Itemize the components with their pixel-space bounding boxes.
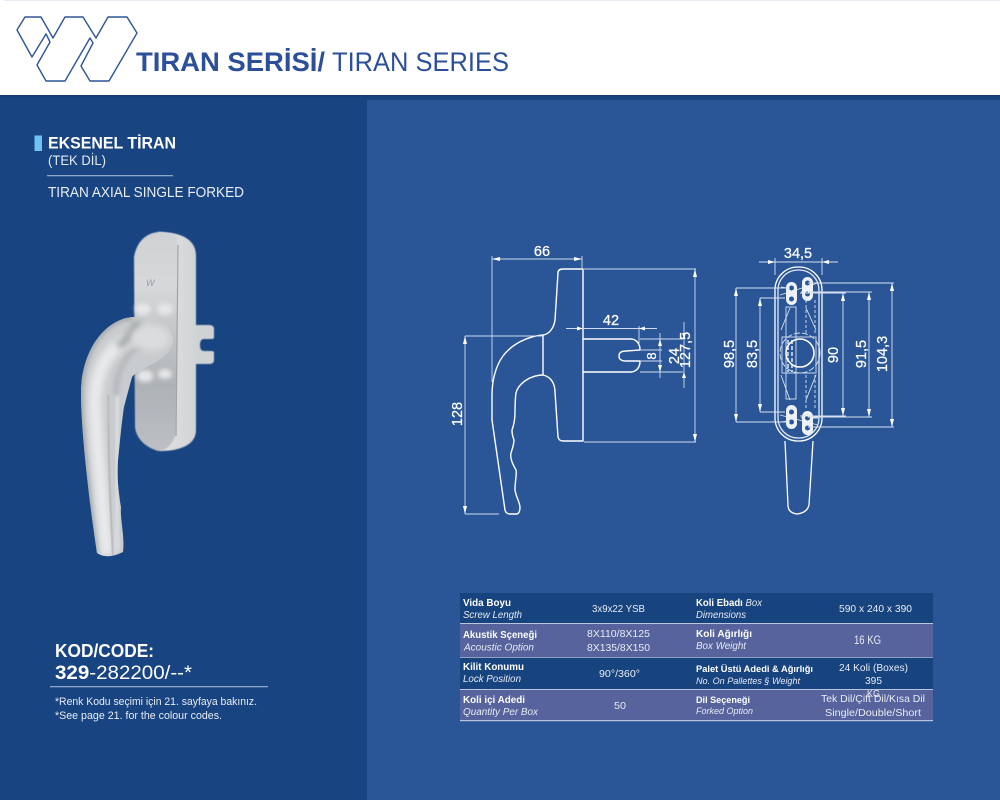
table rows bbox=[460, 593, 933, 721]
colour code notes bbox=[55, 696, 257, 722]
row values right: KG bbox=[867, 688, 880, 700]
plate side bbox=[158, 232, 196, 451]
side view dimension labels: 24 bbox=[667, 348, 683, 364]
row labels right: Dimensions bbox=[696, 610, 746, 621]
row values right: 24 Koli (Boxes) bbox=[839, 662, 908, 674]
row values left: 90°/360° bbox=[599, 668, 640, 680]
front view dimension labels: 34,5 bbox=[784, 246, 812, 262]
row values left: 8X110/8X125 bbox=[587, 628, 650, 640]
title bbox=[136, 47, 509, 77]
row values right bbox=[821, 603, 925, 719]
row labels left: Akustik Sçeneği bbox=[463, 630, 537, 641]
rosette highlights bbox=[135, 303, 173, 382]
row values right: 395 bbox=[865, 675, 882, 687]
title: TIRAN SERİSİ/ bbox=[136, 47, 325, 77]
handle outline bbox=[492, 269, 640, 514]
plate outline bbox=[775, 267, 822, 514]
side view dimension labels: 127,5 bbox=[678, 332, 694, 368]
row values left: 50 bbox=[614, 700, 626, 712]
row labels right: Box Weight bbox=[696, 641, 747, 652]
colour code notes: *See page 21. for the colour codes. bbox=[55, 710, 222, 722]
row labels left bbox=[463, 598, 539, 718]
row values right: Single/Double/Short bbox=[825, 707, 921, 719]
row labels left: Acoustic Option bbox=[463, 642, 534, 654]
row values right: 16 KG bbox=[854, 635, 881, 647]
plate front bbox=[134, 232, 178, 451]
logo bbox=[17, 17, 137, 81]
front view technical drawing bbox=[734, 258, 894, 514]
turkish heading: EKSENEL TİRAN bbox=[48, 134, 176, 152]
product heading bbox=[34, 134, 244, 201]
code label: KOD/CODE: bbox=[55, 641, 154, 661]
code value: 329-282200/--* bbox=[55, 662, 192, 684]
front view dimension labels: 90 bbox=[826, 347, 842, 363]
row labels left: Koli içi Adedi bbox=[463, 695, 525, 706]
side view dimension labels: 8 bbox=[644, 352, 659, 360]
row values right: 590 x 240 x 390 bbox=[839, 603, 912, 615]
front view dimension labels: 91,5 bbox=[854, 340, 870, 368]
side view dimension labels: 66 bbox=[534, 244, 550, 260]
row labels right: Palet Üstü Adedi & Ağırlığı bbox=[696, 664, 813, 674]
forked tab bbox=[583, 339, 640, 372]
front view dimension labels bbox=[722, 246, 891, 372]
title: TIRAN SERIES bbox=[332, 47, 509, 77]
side view technical drawing bbox=[463, 256, 697, 514]
row values left: 3x9x22 YSB bbox=[592, 603, 645, 615]
row labels right: Koli Ebadı Box bbox=[696, 598, 763, 609]
row labels left: Vida Boyu bbox=[463, 598, 511, 609]
side view dimension labels bbox=[450, 244, 694, 426]
row labels right: Dil Seçeneği bbox=[696, 695, 750, 705]
row labels left: Quantity Per Box bbox=[463, 707, 539, 718]
dimension lines bbox=[465, 256, 696, 514]
header band bbox=[0, 0, 1000, 95]
product photo: window handle bbox=[75, 232, 214, 565]
front view dimension labels: 83,5 bbox=[745, 340, 761, 368]
row values right: Tek Dil/Çift Dil/Kısa Dil bbox=[821, 693, 925, 705]
row labels right: Koli Ağırlığı bbox=[696, 629, 752, 640]
front view dimension labels: 98,5 bbox=[722, 340, 738, 368]
english heading: TIRAN AXIAL SINGLE FORKED bbox=[48, 184, 244, 201]
front view dimension labels: 104,3 bbox=[875, 336, 891, 372]
row labels right: No. On Pallettes § Weight bbox=[696, 676, 800, 686]
row labels left: Lock Position bbox=[463, 674, 521, 685]
heading subtitle: (TEK DİL) bbox=[48, 151, 106, 168]
dimension lines bbox=[736, 258, 894, 427]
small logo mark: W bbox=[146, 278, 156, 288]
internal detail bbox=[780, 283, 820, 425]
row labels right: Forked Option bbox=[696, 706, 753, 716]
arrow heads bbox=[734, 260, 894, 427]
product code block bbox=[50, 641, 268, 722]
side view dimension labels: 42 bbox=[603, 313, 619, 329]
row labels left: Kilit Konumu bbox=[463, 662, 524, 673]
side view dimension labels: 128 bbox=[450, 402, 466, 426]
arrow heads bbox=[463, 257, 697, 514]
colour code notes: *Renk Kodu seçimi için 21. sayfaya bakınız. bbox=[55, 696, 257, 708]
row labels right bbox=[696, 598, 813, 716]
lever bbox=[81, 317, 173, 556]
heading marker bbox=[34, 136, 42, 151]
screw slots bbox=[786, 277, 813, 435]
row values left bbox=[587, 603, 650, 712]
mounting tab bbox=[194, 325, 214, 364]
row labels left: Screw Length bbox=[463, 610, 522, 621]
row values left: 8X135/8X150 bbox=[587, 642, 650, 654]
specification table bbox=[460, 593, 933, 721]
left panel background bbox=[0, 95, 367, 800]
